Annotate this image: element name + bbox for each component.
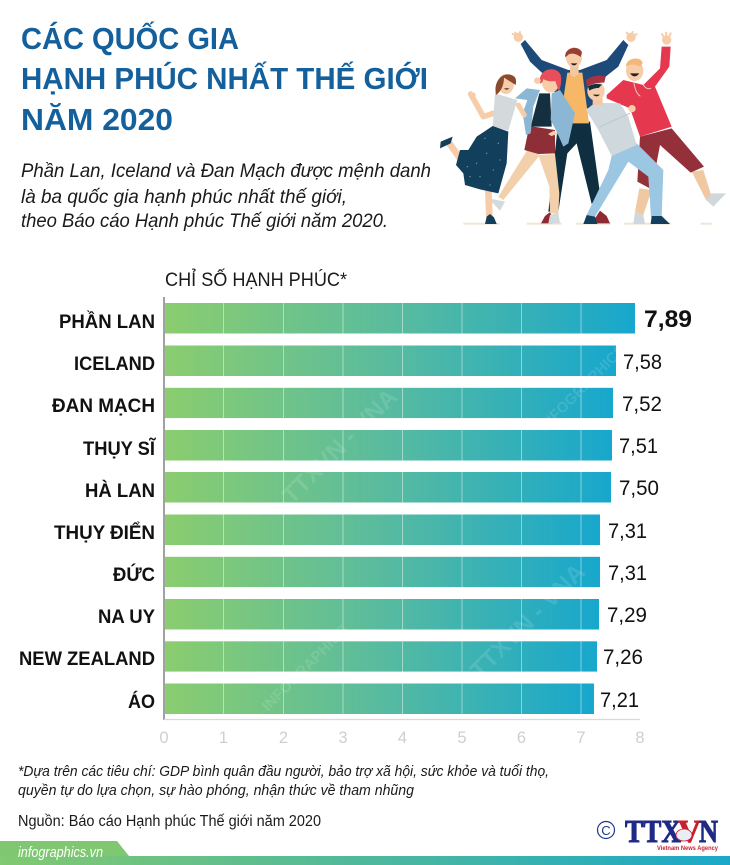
- watermarks: TTXVN - VNA: [465, 559, 591, 684]
- footnote: quyền tự do lựa chọn, sự hào phóng, nhận thức về tham nhũng: [18, 782, 415, 799]
- source: Nguồn: Báo cáo Hạnh phúc Thế giới năm 2020: [18, 813, 321, 830]
- axis ticks: 5: [457, 729, 467, 747]
- person: centre man in navy jacket: [513, 32, 637, 223]
- intro text: theo Báo cáo Hạnh phúc Thế giới năm 2020.: [21, 210, 388, 232]
- values: 7,26: [603, 645, 643, 669]
- values: 7,31: [608, 519, 647, 543]
- wordmark: N: [699, 813, 718, 849]
- axis ticks: 2: [279, 729, 288, 747]
- person: man in red hoodie: [607, 33, 726, 224]
- values: 7,51: [619, 434, 658, 458]
- country labels: NEW ZEALAND: [19, 648, 155, 670]
- wordmark: V: [678, 813, 701, 849]
- values: 7,29: [607, 603, 647, 627]
- title: CÁC QUỐC GIA: [21, 20, 239, 56]
- watermarks: INFOGRAPHICS: [259, 621, 352, 715]
- axis ticks: 3: [338, 729, 348, 747]
- chart heading: CHỈ SỐ HẠNH PHÚC*: [165, 269, 348, 291]
- globe: [676, 829, 692, 841]
- axis ticks: 7: [576, 729, 586, 747]
- axis ticks: 4: [398, 729, 407, 747]
- person: woman with red hair and denim jacket: [488, 69, 575, 223]
- bars: [165, 303, 635, 714]
- bar grid lines: [224, 303, 581, 714]
- values: 7,31: [608, 561, 647, 585]
- intro text: Phần Lan, Iceland và Đan Mạch được mệnh danh: [21, 160, 431, 182]
- website: infographics.vn: [18, 844, 103, 861]
- person: woman in polka-dot skirt: [440, 74, 524, 224]
- watermarks: [259, 341, 629, 715]
- watermarks: INFOGRAPHICS: [536, 341, 629, 435]
- country labels: NA UY: [98, 606, 155, 628]
- axis ticks: 8: [635, 729, 645, 747]
- country labels: THỤY ĐIỂN: [54, 521, 155, 544]
- title: NĂM 2020: [21, 102, 173, 137]
- copyright mark: C: [601, 823, 611, 838]
- footnote: [18, 763, 549, 799]
- wordmark: TTX: [625, 813, 681, 849]
- country labels: HÀ LAN: [85, 479, 155, 502]
- axis ticks: 6: [517, 729, 526, 747]
- watermarks: TTXVN - VNA: [277, 384, 403, 509]
- axis ticks: [159, 729, 645, 747]
- country labels: THỤY SĨ: [83, 437, 156, 460]
- country labels: ĐỨC: [113, 562, 155, 586]
- illustration: group of five happy friends: [440, 32, 726, 225]
- bar chart: happiness index: [19, 297, 692, 747]
- ground shadows: [463, 223, 712, 225]
- intro text: là ba quốc gia hạnh phúc nhất thế giới,: [21, 186, 347, 208]
- axis lines: [163, 297, 165, 720]
- country labels: ICELAND: [74, 353, 155, 375]
- values: 7,89: [644, 306, 692, 333]
- title: [21, 20, 428, 137]
- footer band: [0, 841, 730, 865]
- values: 7,21: [600, 688, 639, 712]
- logo: TTXVN: [598, 813, 718, 852]
- country labels: ĐAN MẠCH: [52, 395, 155, 417]
- country labels: [19, 310, 156, 713]
- title: HẠNH PHÚC NHẤT THẾ GIỚI: [21, 60, 428, 96]
- person: boy with cap and grey tee: [583, 76, 670, 224]
- axis ticks: 0: [159, 729, 169, 747]
- values: 7,50: [619, 476, 659, 500]
- values: 7,52: [622, 392, 662, 416]
- country labels: ÁO: [128, 690, 155, 713]
- intro text: [21, 160, 431, 232]
- baseline: [164, 718, 640, 720]
- agency name: Vietnam News Agency: [657, 845, 718, 852]
- footnote: *Dựa trên các tiêu chí: GDP bình quân đầu người, bảo trợ xã hội, sức khỏe và tuổi thọ,: [18, 763, 549, 780]
- country labels: PHẦN LAN: [59, 310, 155, 333]
- values: 7,58: [623, 350, 662, 374]
- axis ticks: 1: [219, 729, 228, 747]
- values: [600, 306, 692, 712]
